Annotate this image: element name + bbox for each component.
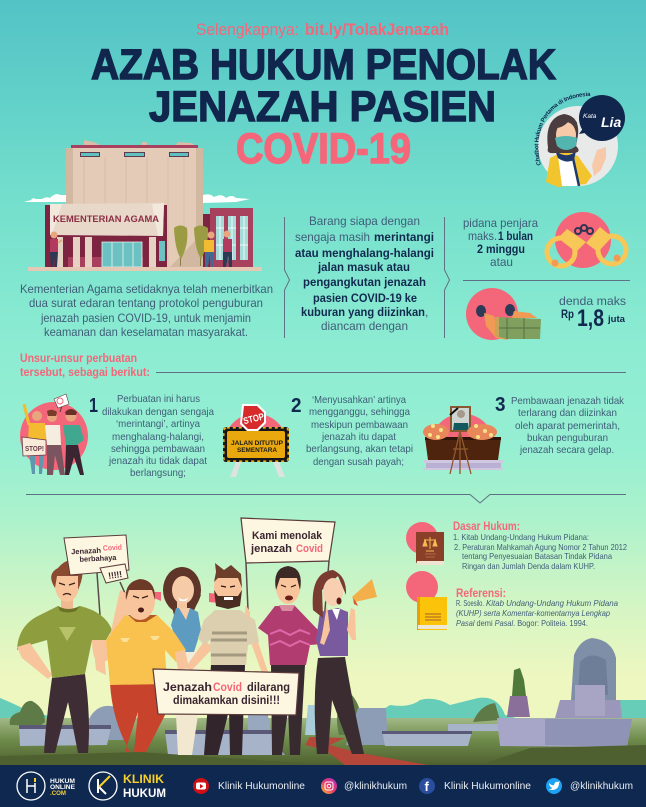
icon: road closed sign: JALAN DITUTUP bbox=[231, 440, 284, 447]
icon: handcuffs bbox=[547, 212, 626, 268]
element 3 text bbox=[511, 395, 625, 456]
staff figures bbox=[50, 230, 232, 267]
intro text: jenazah pasien COVID-19, untuk menjamin bbox=[40, 311, 251, 325]
title: COVID-19 bbox=[236, 125, 411, 173]
sign stick left bbox=[97, 561, 329, 622]
hills bbox=[0, 698, 646, 722]
title: AZAB HUKUM PENOLAK bbox=[91, 41, 556, 89]
element 2 text: dengan susah payah; bbox=[313, 456, 404, 468]
icon: road closed sign: STOP bbox=[242, 411, 266, 427]
illustration: ministry building bbox=[24, 140, 262, 271]
fine amount bbox=[559, 294, 626, 332]
element 3 text: bukan penguburan bbox=[527, 432, 608, 444]
sign text: KEMENTERIAN AGAMA bbox=[53, 214, 159, 225]
icon: protesters: STOP! bbox=[25, 446, 44, 453]
placard: dilarang dimakamkan: Covid bbox=[213, 682, 242, 694]
placard: dilarang dimakamkan: dimakamkan disini!!! bbox=[173, 695, 280, 707]
logo: hukumonline: ONLINE bbox=[50, 784, 75, 791]
legal basis: Ringan dan Jumlah Denda dalam KUHP. bbox=[462, 561, 595, 571]
protest crowd bbox=[17, 518, 377, 755]
instagram: @klinikhukum bbox=[344, 780, 407, 792]
woman in blue bbox=[163, 567, 201, 755]
element 1 text: berlangsung; bbox=[130, 467, 186, 479]
link line: Selengkapnya: bbox=[196, 20, 299, 39]
number 2: 2 bbox=[291, 395, 302, 417]
middle tomb bbox=[165, 715, 285, 755]
central statement: diancam dengan bbox=[321, 319, 408, 333]
legal basis: 1. Kitab Undang-Undang Hukum Pidana: bbox=[453, 532, 589, 542]
chatbot woman bbox=[546, 114, 606, 187]
central statement: jalan masuk atau bbox=[317, 260, 410, 274]
placard: kami menolak bbox=[241, 518, 335, 563]
section heading bbox=[20, 351, 150, 379]
element 2 text bbox=[306, 394, 413, 468]
element 3 text: jenazah secara gelap. bbox=[519, 444, 614, 456]
speech bubble: Lia bbox=[601, 114, 621, 130]
left tomb bbox=[19, 706, 124, 746]
fine amount: denda maks bbox=[559, 294, 626, 308]
placard: kami menolak: Kami menolak bbox=[252, 530, 323, 542]
prison sentence text: maks. bbox=[468, 229, 497, 243]
legal basis: Dasar Hukum: bbox=[453, 519, 520, 533]
placard: jenazah covid berbahaya bbox=[64, 535, 129, 583]
legal basis bbox=[453, 519, 627, 571]
references: Referensi: bbox=[456, 586, 506, 600]
references: R. Soesilo. bbox=[456, 598, 484, 608]
prison sentence text: 2 minggu bbox=[477, 242, 525, 256]
central statement: merintangi bbox=[374, 230, 434, 244]
portico bbox=[45, 205, 167, 267]
man in yellow bbox=[92, 579, 189, 752]
placard: dilarang dimakamkan bbox=[153, 669, 299, 715]
separator bbox=[463, 280, 630, 282]
curved tagline: Chatbot Hukum Pertama di Indonesia bbox=[534, 92, 590, 166]
element 2 text: ‘Menyusahkan’ artinya bbox=[312, 394, 406, 406]
intro text: dua surat edaran tentang protokol penguburan bbox=[29, 296, 263, 310]
red path bbox=[305, 737, 428, 765]
speech bubble: Kata bbox=[583, 113, 597, 120]
right annex bbox=[203, 214, 213, 267]
twitter: @klinikhukum bbox=[570, 780, 633, 792]
icon: road closed sign bbox=[223, 404, 289, 477]
element 2 text: mengganggu, sehingga bbox=[309, 406, 410, 418]
fine amount: juta bbox=[607, 314, 626, 325]
central statement: , bbox=[425, 305, 428, 319]
bushes bbox=[10, 693, 500, 735]
facebook bbox=[419, 778, 531, 794]
placard: kami menolak: Covid bbox=[296, 543, 323, 555]
right tombs bbox=[305, 705, 500, 746]
icon: money hand-over bbox=[466, 288, 541, 340]
placard: jenazah covid berbahaya: !!!!! bbox=[108, 569, 123, 581]
central statement: pengangkutan jenazah bbox=[303, 275, 426, 289]
logo: klinik hukum bbox=[89, 772, 166, 800]
references bbox=[456, 586, 618, 628]
trees bbox=[174, 226, 208, 259]
logo: hukumonline: HUKUM bbox=[50, 778, 75, 785]
element 1 text bbox=[102, 393, 214, 479]
arrow divider bbox=[26, 494, 626, 503]
man in pink bbox=[245, 566, 322, 755]
placard: dilarang dimakamkan: dilarang bbox=[247, 682, 290, 694]
placard: dilarang dimakamkan: Jenazah bbox=[163, 682, 212, 694]
ground bbox=[0, 718, 646, 765]
placard: jenazah covid berbahaya: Jenazah bbox=[71, 546, 102, 556]
intro text: Kementerian Agama setidaknya telah menerbitkan bbox=[20, 282, 273, 296]
central statement: atau menghalang-halangi bbox=[295, 246, 434, 260]
placard: jenazah covid berbahaya: Covid bbox=[103, 543, 122, 553]
logo: hukumonline: .COM bbox=[50, 790, 66, 797]
youtube: Klinik Hukumonline bbox=[218, 780, 305, 792]
central statement: kuburan yang diizinkan bbox=[301, 305, 425, 319]
references: Pasal demi Pasal. Bogor: Politeia. 1994. bbox=[456, 618, 588, 628]
logo: klinik hukum: KLINIK bbox=[123, 774, 165, 786]
element 1 text: ‘merintangi’, artinya bbox=[116, 418, 200, 430]
icon: law book bbox=[406, 522, 444, 565]
element 1 text: menghalang-halangi, bbox=[112, 431, 204, 443]
central statement: Barang siapa dengan bbox=[309, 214, 420, 228]
central statement: pasien COVID-19 ke bbox=[313, 291, 417, 305]
element 1 text: sehingga pembawaan bbox=[111, 443, 205, 455]
central statement: sengaja masih bbox=[295, 230, 370, 244]
element 2 text: berlangsung, akan tetapi bbox=[306, 443, 413, 455]
title: JENAZAH PASIEN bbox=[149, 83, 496, 131]
prison sentence text: 1 bulan bbox=[498, 229, 533, 243]
element 3 text: oleh aparat pemerintah, bbox=[515, 420, 620, 432]
fine amount: Rp bbox=[561, 307, 574, 321]
placard: kami menolak: jenazah bbox=[250, 543, 292, 555]
fine amount: 1,8 bbox=[577, 305, 604, 332]
prison sentence text: pidana penjara bbox=[463, 216, 538, 230]
intro text bbox=[20, 282, 273, 339]
heading rule bbox=[156, 372, 626, 374]
facebook: f bbox=[424, 779, 430, 794]
central statement bbox=[295, 214, 434, 333]
man in green bbox=[17, 560, 112, 753]
pavement bbox=[28, 267, 262, 271]
small sign bbox=[100, 564, 128, 583]
intro text: keamanan dan keselamatan masyarakat. bbox=[44, 325, 248, 339]
small flags bbox=[154, 592, 219, 603]
clouds bbox=[24, 194, 250, 203]
element 2 text: jenazah itu dapat bbox=[321, 431, 396, 443]
references: Kitab Undang-Undang Hukum Pidana bbox=[486, 598, 618, 608]
element 3 text: Pembawaan jenazah tidak bbox=[511, 395, 625, 407]
facebook: Klinik Hukumonline bbox=[444, 780, 531, 792]
link line bbox=[196, 20, 449, 39]
number 3: 3 bbox=[495, 394, 506, 416]
element 1 text: dilakukan dengan sengaja bbox=[102, 406, 214, 418]
element 1 text: jenazah itu tidak dapat bbox=[108, 455, 207, 467]
twitter bbox=[546, 778, 633, 794]
speech bubble bbox=[579, 95, 625, 141]
man with beard bbox=[185, 563, 268, 755]
link line: bit.ly/TolakJenazah bbox=[305, 20, 449, 39]
bracket dividers bbox=[284, 217, 450, 338]
woman with megaphone bbox=[313, 570, 377, 754]
element 1 text: Perbuatan ini harus bbox=[117, 393, 200, 405]
placard: jenazah covid berbahaya: berbahaya bbox=[79, 553, 117, 564]
references: (KUHP) serta Komentar-komentarnya Lengkap bbox=[456, 608, 610, 618]
footer bbox=[0, 765, 646, 807]
tower bbox=[66, 148, 203, 267]
instagram bbox=[321, 778, 407, 794]
door bbox=[102, 242, 142, 267]
section heading: Unsur-unsur perbuatan bbox=[20, 351, 137, 365]
logo: klinik hukum: HUKUM bbox=[123, 788, 166, 800]
icon: yellow book bbox=[406, 571, 447, 630]
cemetery landscape bbox=[0, 638, 646, 765]
logo: hukumonline bbox=[17, 772, 75, 800]
title bbox=[91, 41, 556, 173]
Kata Lia chatbot badge bbox=[534, 92, 625, 187]
legal basis: tentang Penyesuaian Batasan Tindak Pidana bbox=[462, 551, 612, 561]
prison sentence text bbox=[463, 216, 538, 269]
youtube bbox=[193, 778, 305, 794]
prison sentence text: atau bbox=[490, 255, 513, 269]
element 3 text: terlarang dan diizinkan bbox=[518, 407, 617, 419]
icon: road closed sign: SEMENTARA bbox=[237, 447, 277, 454]
dark grass strip bbox=[0, 745, 646, 765]
sign board bbox=[50, 203, 164, 236]
section heading: tersebut, sebagai berikut: bbox=[20, 365, 150, 379]
number 1: 1 bbox=[89, 395, 98, 417]
icon: protesters bbox=[20, 394, 88, 475]
element 2 text: meskipun pembawaan bbox=[311, 419, 408, 431]
large monument bbox=[497, 638, 632, 747]
icon: coffin with portrait bbox=[423, 406, 503, 474]
